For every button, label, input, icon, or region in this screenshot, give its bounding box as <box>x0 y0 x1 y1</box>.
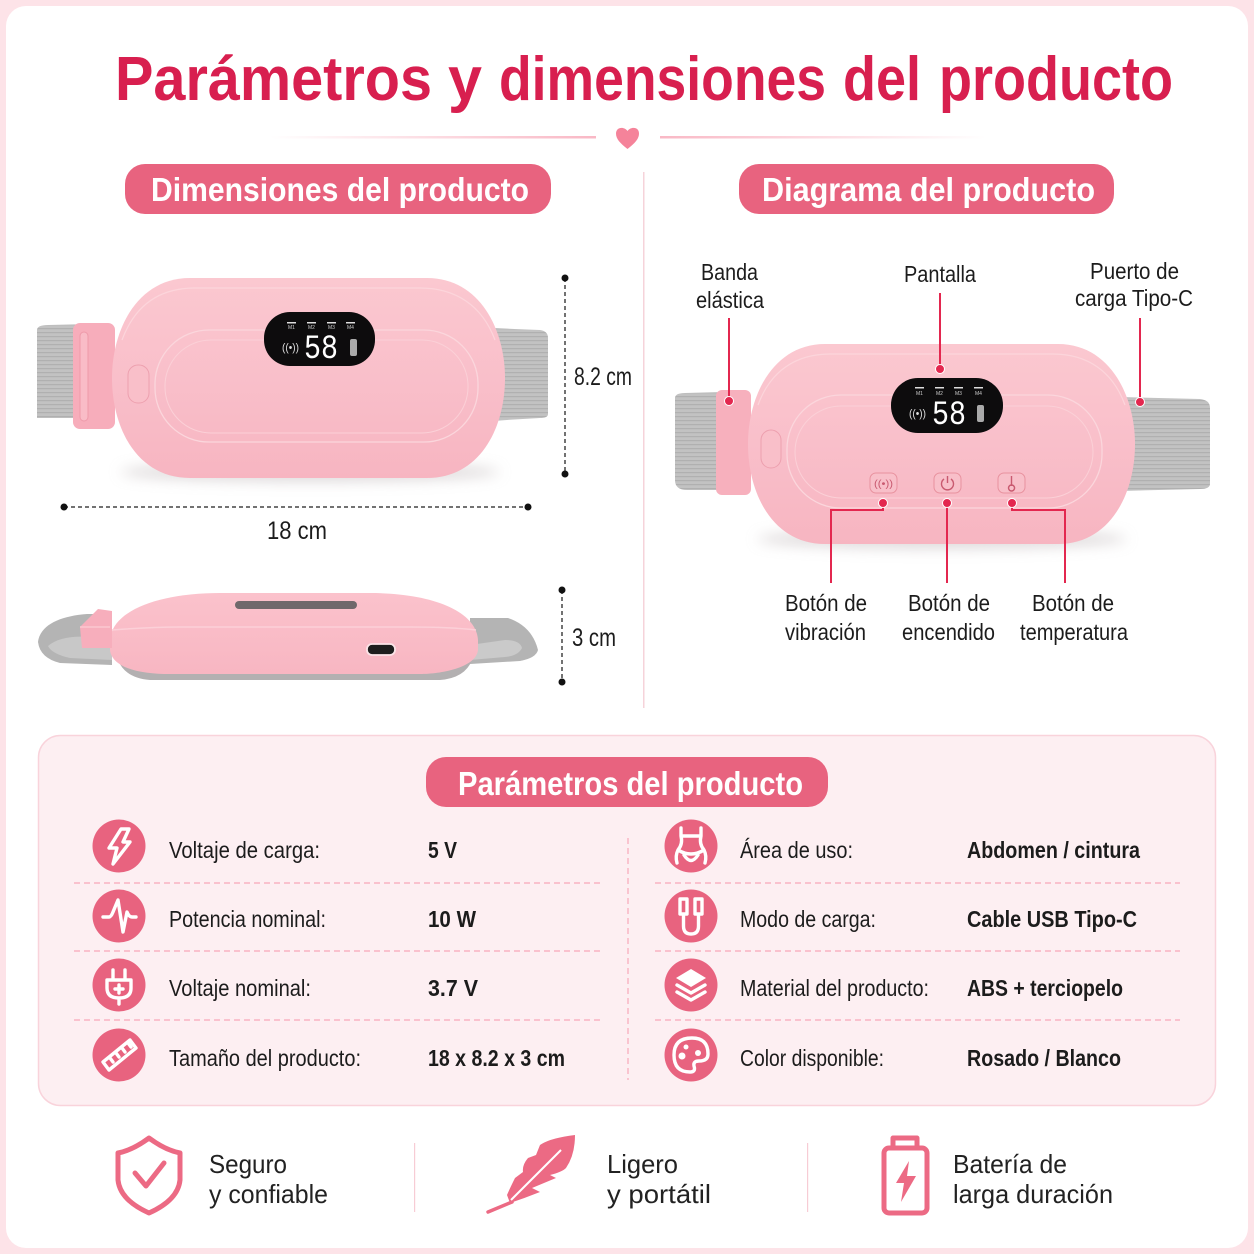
callout: elastic band: Banda <box>701 259 758 285</box>
callout: power button: encendido <box>902 619 995 645</box>
icon: ruler <box>92 1028 146 1082</box>
icon: pulse wave <box>92 890 146 942</box>
callout: screen <box>904 261 976 374</box>
row: usage area <box>740 837 1140 863</box>
row: charging mode: Modo de carga: <box>740 906 876 932</box>
front view of device with dimensions: M4 <box>347 325 354 331</box>
callout: screen: Pantalla <box>904 261 976 287</box>
row: rated power: 10 W <box>428 906 476 932</box>
title: dimensiones <box>499 45 826 114</box>
front view of device with dimensions: M2 <box>308 325 315 331</box>
row: nominal voltage: 3.7 V <box>428 975 479 1001</box>
benefit: safe and reliable <box>209 1149 328 1209</box>
callout: temperature button <box>1008 498 1128 645</box>
annotated device diagram: 58 <box>932 397 966 435</box>
title divider with heart <box>270 128 986 149</box>
icon: waist <box>664 820 718 872</box>
heading pill: diagram: Diagrama del producto <box>762 171 1095 208</box>
row: available colour <box>740 1045 1121 1071</box>
width dimension: 18 cm <box>267 517 327 545</box>
callout: type-C port <box>1075 258 1193 406</box>
row: product size <box>169 1045 565 1071</box>
callout: temperature button: Botón de <box>1032 590 1114 616</box>
benefit: safe and reliable: Seguro <box>209 1149 287 1179</box>
row: charging voltage <box>169 837 458 863</box>
row: charging mode: Cable USB Tipo-C <box>967 906 1137 932</box>
row: rated power <box>169 906 476 932</box>
heading pill: diagram <box>739 164 1114 214</box>
callout: elastic band <box>696 259 764 406</box>
annotated device diagram: M4 <box>975 391 982 397</box>
icon: plug <box>92 958 146 1012</box>
benefit: long battery life: Batería de <box>953 1149 1067 1179</box>
annotated device diagram: ((•)) <box>909 408 926 420</box>
icon: shield <box>118 1138 180 1213</box>
width dimension <box>60 504 532 545</box>
row: product size: Tamaño del producto: <box>169 1045 361 1071</box>
benefit: light and portable: y portátil <box>607 1179 711 1209</box>
front view of device with dimensions <box>37 278 548 481</box>
height dimension: 8.2 cm <box>574 363 632 391</box>
callout: vibration button <box>785 498 888 645</box>
benefit: long battery life <box>953 1149 1113 1209</box>
benefit: safe and reliable: y confiable <box>209 1179 328 1209</box>
callout: vibration button: Botón de <box>785 590 867 616</box>
row: usage area: Abdomen / cintura <box>967 837 1140 863</box>
annotated device diagram: M1 <box>916 391 923 397</box>
row: product material <box>740 975 1123 1001</box>
callout: power button: Botón de <box>908 590 990 616</box>
row: charging mode <box>740 906 1137 932</box>
front view of device with dimensions: M1 <box>288 325 295 331</box>
icon: battery <box>884 1138 927 1213</box>
row: product material: Material del producto: <box>740 975 929 1001</box>
annotated device diagram: M3 <box>955 391 962 397</box>
vertical divider <box>643 172 644 708</box>
benefit: light and portable <box>607 1149 711 1209</box>
row: charging voltage: Voltaje de carga: <box>169 837 320 863</box>
title: Parámetros <box>115 45 432 114</box>
icon: layers <box>664 958 718 1012</box>
callout: power button <box>902 498 995 645</box>
front view of device with dimensions: 58 <box>304 331 338 369</box>
title: y <box>448 45 483 114</box>
title: producto <box>939 45 1173 114</box>
title <box>115 45 1173 114</box>
height dimension <box>562 274 632 478</box>
row: usage area: Área de uso: <box>740 837 853 863</box>
callout: vibration button: vibración <box>785 619 866 645</box>
callout: type-C port: carga Tipo-C <box>1075 285 1193 311</box>
heading pill: dimensions <box>125 164 551 214</box>
heading pill: parameters: Parámetros del producto <box>458 765 803 802</box>
row: product size: 18 x 8.2 x 3 cm <box>428 1045 565 1071</box>
icon: lightning bolt <box>92 820 146 872</box>
icon: USB cable <box>664 890 718 942</box>
front view of device with dimensions: ((•)) <box>282 342 299 354</box>
icon: palette <box>664 1028 718 1082</box>
thickness dimension <box>558 586 616 686</box>
row: charging voltage: 5 V <box>428 837 458 863</box>
annotated device diagram: ((•)) <box>874 479 893 490</box>
heading pill: parameters <box>426 757 828 807</box>
annotated device diagram <box>675 344 1210 548</box>
heading pill: dimensions: Dimensiones del producto <box>151 171 529 208</box>
row: product material: ABS + terciopelo <box>967 975 1123 1001</box>
row: nominal voltage: Voltaje nominal: <box>169 975 311 1001</box>
side view of device <box>38 593 538 680</box>
row: available colour: Rosado / Blanco <box>967 1045 1121 1071</box>
thickness dimension: 3 cm <box>572 624 616 652</box>
front view of device with dimensions: M3 <box>328 325 335 331</box>
row: rated power: Potencia nominal: <box>169 906 326 932</box>
panel: product parameters <box>38 736 1216 1106</box>
callout: elastic band: elástica <box>696 287 764 313</box>
benefit: light and portable: Ligero <box>607 1149 678 1179</box>
callout: type-C port: Puerto de <box>1090 258 1179 284</box>
row: available colour: Color disponible: <box>740 1045 884 1071</box>
benefit: long battery life: larga duración <box>953 1179 1113 1209</box>
annotated device diagram: M2 <box>936 391 943 397</box>
title: del <box>843 45 921 114</box>
row: nominal voltage <box>169 975 479 1001</box>
icon: feather <box>488 1135 575 1212</box>
callout: temperature button: temperatura <box>1020 619 1128 645</box>
